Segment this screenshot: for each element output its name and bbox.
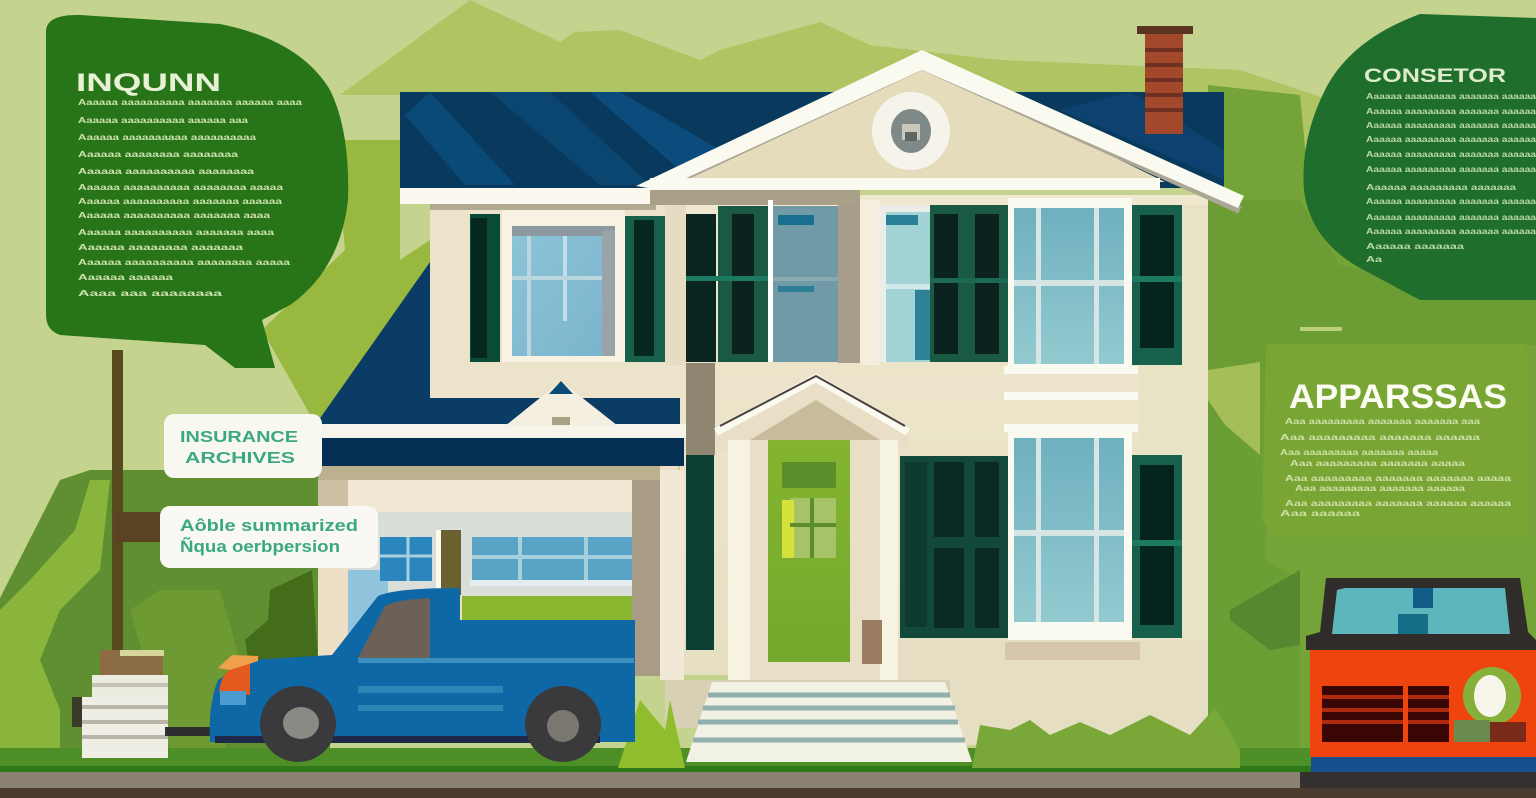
- upper window 4 with shutters: [1008, 198, 1182, 368]
- panel: top-left speech bubble: [46, 15, 348, 368]
- lower wall base: [880, 640, 1208, 745]
- eave shadows: [430, 204, 656, 210]
- front steps: [665, 680, 972, 762]
- cable from truck to stack: [165, 727, 215, 736]
- truck wheels: [260, 686, 601, 762]
- label card 2: Ñqua oerbpersion: [180, 536, 340, 556]
- roof band over garage: [316, 424, 694, 438]
- text block: right lower body: Aaa aaaaaaaaa aaaaaaa aaaaaa: [1280, 433, 1481, 442]
- bush near steps: [618, 700, 685, 768]
- text block: right lower body: Aaa aaaaaaaaa aaaaaaa aaaaa: [1290, 459, 1466, 468]
- heading: APPARSSAS: APPARSSAS: [1289, 378, 1507, 416]
- text block: top-right body: Aa: [1366, 255, 1383, 264]
- text block: right lower body: [1280, 417, 1512, 518]
- orange generator: [1300, 578, 1536, 788]
- text block: right lower body: Aaa aaaaaaaaa aaaaaaa aaaaa: [1280, 448, 1439, 457]
- text block: top-left body: Aaaaaa aaaaaaaaaa aaaaaaa aaaa: [78, 211, 271, 220]
- decorative dash: [1300, 327, 1342, 331]
- text block: top-left body: Aaaaaa aaaaaaaaaa aaaaaa aaa: [78, 116, 249, 125]
- ledge: [1004, 366, 1138, 374]
- text block: right lower body: Aaa aaaaaaaaa aaaaaaa aaaaaa: [1295, 484, 1466, 493]
- text block: top-right body: Aaaaaa aaaaaaaaa aaaaaaa aaaaaa: [1366, 227, 1536, 236]
- house: [316, 26, 1244, 768]
- upper window 2 with shutters: [686, 200, 880, 365]
- gable trim: [660, 66, 1240, 210]
- text block: top-right body: Aaaaaa aaaaaaa: [1366, 242, 1465, 251]
- panel: right lower green box: [1262, 344, 1526, 537]
- label card 1: [164, 414, 322, 478]
- label card 2: Aôble summarized: [180, 516, 358, 535]
- label card 1: ARCHIVES: [185, 450, 295, 467]
- text block: top-left body: Aaaaaa aaaaaaaaaa aaaaaaa aaaa: [78, 228, 275, 237]
- text block: right lower body: Aaa aaaaaaaaa aaaaaaa aaaaaaa aaa: [1285, 417, 1481, 426]
- text block: top-left body: Aaaa aaa aaaaaaaa: [78, 289, 223, 298]
- text block: top-right body: Aaaaaa aaaaaaaaa aaaaaaa aaaaaa: [1366, 150, 1536, 159]
- ground and road: [0, 748, 1536, 798]
- garage wing: [316, 381, 694, 680]
- text block: top-right body: Aaaaaa aaaaaaaaa aaaaaaa aaaaaa: [1366, 165, 1536, 174]
- label card 2: [160, 506, 378, 568]
- text block: top-right body: Aaaaaa aaaaaaaaa aaaaaaa aaaaaa: [1366, 197, 1536, 206]
- text block: right lower body: Aaa aaaaaaaaa aaaaaaa aaaaaaa aaaaa: [1285, 474, 1512, 483]
- gable: [655, 62, 1165, 182]
- heading: top-right: CONSETOR: [1364, 66, 1506, 87]
- signpost pole: [112, 350, 123, 650]
- round gable window: [872, 92, 950, 170]
- text block: top-right body: Aaaaaa aaaaaaaaa aaaaaaa aaaaaa: [1366, 107, 1536, 116]
- text block: top-right body: Aaaaaa aaaaaaaaa aaaaaaa aaaaaa: [1366, 121, 1536, 130]
- upper window 3 with shutters: [878, 205, 1008, 362]
- heading: top-left: INQUNN: [76, 69, 221, 97]
- text block: top-left body: Aaaaaa aaaaaaaaaa aaaaaaaa aaaaa: [78, 183, 284, 192]
- stack of paper: [72, 650, 168, 758]
- text block: top-right body: Aaaaaa aaaaaaaaa aaaaaaa aaaaaa: [1366, 92, 1536, 101]
- text block: top-left body: Aaaaaa aaaaaaaaaa aaaaaaaa aaaaa: [78, 258, 291, 267]
- text block: top-right body: [1366, 92, 1536, 264]
- garage door: [348, 512, 632, 596]
- text block: top-right body: Aaaaaa aaaaaaaaa aaaaaaa aaaaaa: [1366, 135, 1536, 144]
- upper window 1 with shutters: [470, 205, 686, 365]
- text block: top-left body: Aaaaaa aaaaaaaaaa aaaaaaaaaa: [78, 133, 257, 142]
- text block: top-left body: Aaaaaa aaaaaaaaaa aaaaaaa aaaaaa: [78, 197, 283, 206]
- lower left roof: [316, 262, 686, 426]
- text block: right lower body: Aaa aaaaaaaaa aaaaaaa aaaaaa aaaaaa: [1285, 499, 1512, 508]
- chimney: [1137, 26, 1193, 134]
- main wall: [430, 205, 1208, 398]
- green door: [768, 440, 850, 662]
- centre column and trim: [686, 363, 715, 650]
- text block: top-left body: Aaaaaa aaaaaaaaaa aaaaaaaa: [78, 167, 255, 176]
- text block: top-right body: Aaaaaa aaaaaaaaa aaaaaaa aaaaaa: [1366, 213, 1536, 222]
- pickup truck: [210, 588, 635, 762]
- porch and door: [716, 376, 908, 680]
- text block: top-left body: Aaaaaa aaaaaaaaaa aaaaaaa aaaaaa aaaa: [78, 98, 303, 107]
- panel: top-right bubble: [1303, 14, 1536, 300]
- text block: top-left body: [78, 98, 303, 298]
- text block: top-left body: Aaaaaa aaaaaaaa aaaaaaaa: [78, 150, 239, 159]
- text block: top-left body: Aaaaaa aaaaaaaa aaaaaaa: [78, 243, 244, 252]
- text block: right lower body: Aaa aaaaaa: [1280, 509, 1361, 518]
- text block: top-right body: Aaaaaa aaaaaaaaa aaaaaaa: [1366, 183, 1517, 192]
- signpost arm: [115, 512, 161, 542]
- small dormer: [505, 381, 618, 426]
- hedges: [972, 708, 1240, 768]
- label card 1: INSURANCE: [180, 429, 298, 446]
- text block: top-left body: Aaaaaa aaaaaa: [78, 273, 174, 282]
- upper roof: [400, 92, 1224, 188]
- lower window with shutters: [900, 430, 1182, 660]
